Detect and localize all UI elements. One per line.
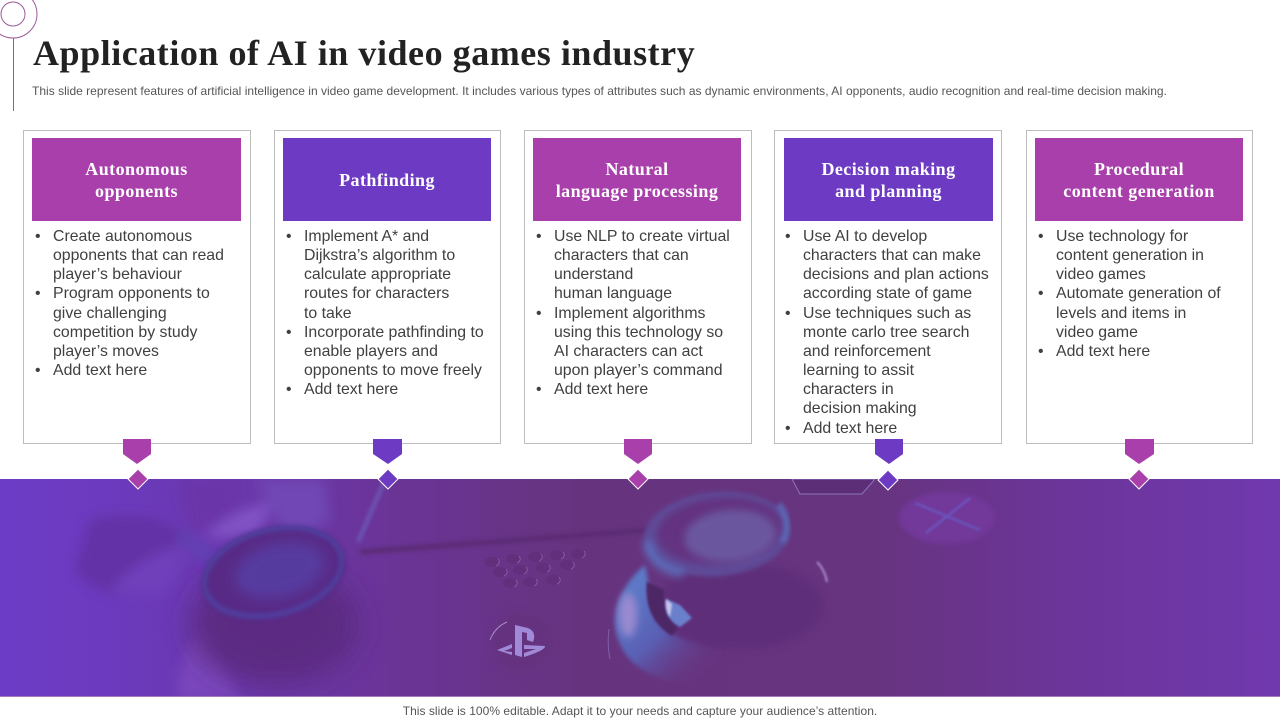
text: decision making and planning [786,228,989,437]
text: pathfinding: routes for characters [304,285,449,302]
heading: decision making and planning [784,138,993,221]
text: autonomous opponents: Add text here [53,362,147,379]
text: decision making and planning: Add text here [803,420,897,437]
text: autonomous opponents: player’s moves [53,343,159,360]
text: natural language processing: Use NLP to create virtual [554,228,730,245]
marker 2 [373,439,402,489]
text: procedural content generation: Add text here [1056,343,1150,360]
text: autonomous opponents: give challenging [53,305,167,322]
text: natural language processing: characters that can [554,247,689,264]
text: autonomous opponents: competition by study [53,324,197,341]
connector markers [123,439,1154,491]
bottom band edge [0,696,1280,697]
heading: natural language processing: language processing [556,180,718,200]
text: natural language processing: Implement algorithms [554,305,705,322]
heading: autonomous opponents: Autonomous [85,158,188,178]
text: decision making and planning: characters that can make [803,247,981,264]
heading: decision making and planning: and planning [835,180,942,200]
text: autonomous opponents [36,228,224,379]
triangle button [792,479,875,494]
panel: pathfinding [274,130,501,444]
cross button [899,492,995,544]
text: decision making and planning: decisions and plan actions [803,266,989,283]
text: autonomous opponents: Create autonomous [53,228,192,245]
right stick cap [641,486,793,582]
text: natural language processing: Add text here [554,381,648,398]
text: natural language processing: AI characters can act [554,343,703,360]
text: natural language processing: human language [554,285,672,302]
heading: procedural content generation: content generation [1063,180,1215,200]
right stick stem [666,570,817,644]
text: procedural content generation [1038,228,1221,360]
text: decision making and planning: characters in [803,381,894,398]
text: decision making and planning: according state of game [803,285,972,302]
text: natural language processing: using this technology so [554,324,723,341]
text: pathfinding: Dijkstra’s algorithm to [304,247,455,264]
marker 5 [1125,439,1154,489]
heading: natural language processing: Natural [605,158,669,178]
panel: procedural content generation [1026,130,1253,444]
text: procedural content generation: content generation in [1056,247,1204,264]
speaker holes [485,552,537,588]
text: natural language processing [536,228,730,398]
text: procedural content generation: video game [1056,324,1138,341]
text: pathfinding: opponents to move freely [304,362,482,379]
text: natural language processing: understand [554,266,633,283]
text: pathfinding: Implement A* and [304,228,429,245]
text: autonomous opponents: player’s behaviour [53,266,182,283]
text: decision making and planning: learning to assit [803,362,914,379]
heading: autonomous opponents [32,138,241,221]
heading: natural language processing [533,138,741,221]
footer note: This slide is 100% editable. Adapt it to your needs and capture your audience’s attention. [403,704,877,718]
text: procedural content generation: levels and items in [1056,305,1186,322]
panel: autonomous opponents [23,130,251,444]
title: Application of AI in video games industry [33,33,695,73]
text: procedural content generation: Automate generation of [1056,285,1221,302]
PlayStation logo [494,619,517,664]
text: autonomous opponents: opponents that can read [53,247,224,264]
text: decision making and planning: Use techniques such as [803,305,971,322]
marker 1 [123,439,151,489]
marker 3 [624,439,652,489]
text: procedural content generation: video games [1056,266,1146,283]
text: pathfinding [286,228,484,398]
heading: procedural content generation [1035,138,1243,221]
text: pathfinding: enable players and [304,343,438,360]
heading: autonomous opponents: opponents [95,180,178,200]
text: decision making and planning: Use AI to develop [803,228,927,245]
text: decision making and planning: and reinforcement [803,343,931,360]
photo band: game controller [0,479,1280,696]
text: pathfinding: Incorporate pathfinding to [304,324,484,341]
panel: natural language processing [524,130,752,444]
heading: pathfinding: Pathfinding [339,170,435,190]
heading: decision making and planning: Decision making [821,158,956,178]
right stick base crescent [613,564,697,678]
subtitle: This slide represent features of artificial intelligence in video game development. It includes various types of attributes such as dynamic environments, AI opponents, audio recognition and real-time decision making. [32,84,1167,98]
text: pathfinding: calculate appropriate [304,266,451,283]
text: decision making and planning: decision making [803,400,917,417]
text: autonomous opponents: Program opponents to [53,285,210,302]
heading: procedural content generation: Procedural [1094,158,1184,178]
decorative circles and line [0,0,38,111]
heading: pathfinding [283,138,491,221]
text: natural language processing: upon player’s command [554,362,723,379]
text: decision making and planning: monte carlo tree search [803,324,969,341]
text: procedural content generation: Use technology for [1056,228,1188,245]
text: pathfinding: Add text here [304,381,398,398]
marker 4 [875,439,903,490]
text: pathfinding: to take [304,305,352,322]
panel: decision making and planning [774,130,1002,444]
